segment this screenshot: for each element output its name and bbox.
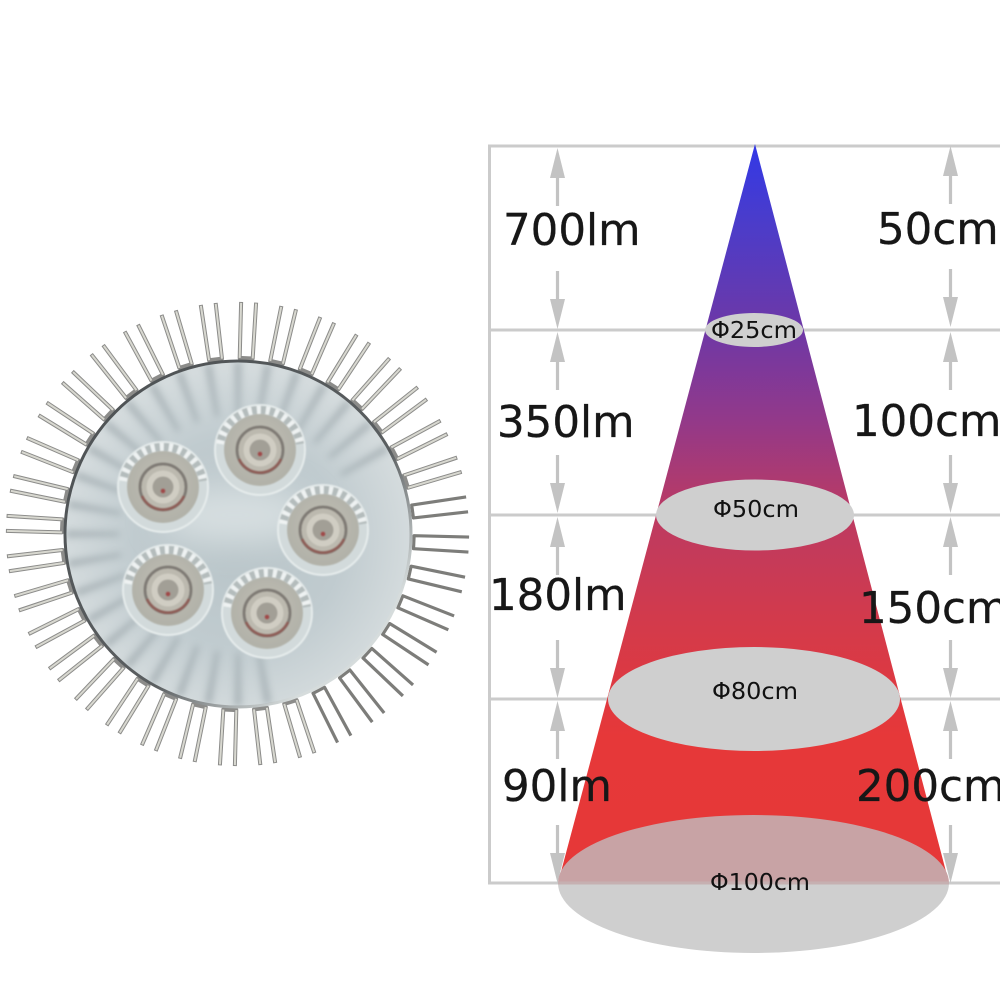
distance labels: 50cm [877, 205, 999, 255]
beam ellipse 50cm: Φ50cm [713, 497, 799, 523]
icon: LED lens 3 [278, 485, 368, 575]
lumen labels: 350lm [497, 398, 634, 448]
lumen labels: 90lm [502, 762, 612, 812]
lumen labels [489, 206, 640, 812]
lumen labels: 180lm [489, 571, 626, 621]
panel: LED lamp photo [6, 302, 469, 766]
reflected fin shadows [66, 362, 389, 706]
beam ellipse 25cm [705, 313, 803, 347]
beam ellipse 80cm [608, 647, 900, 751]
icon: LED lens 1 [118, 442, 208, 532]
left arrows [550, 148, 565, 883]
beam ellipse 25cm: Φ25cm [711, 318, 797, 344]
icon: LED lens 5 [222, 568, 312, 658]
right arrows [943, 146, 958, 883]
beam ellipse 80cm: Φ80cm [712, 679, 798, 705]
lumen labels: 700lm [503, 206, 640, 256]
beam ellipse 50cm [656, 480, 854, 550]
distance labels [852, 205, 1000, 812]
lamp face disc [65, 361, 411, 707]
chart frame and distance grid [489, 146, 1000, 883]
distance labels: 100cm [852, 397, 1000, 447]
light cone [558, 144, 949, 883]
heat sink fins [6, 302, 469, 766]
beam ellipse 100cm [558, 813, 949, 953]
beam ellipse 100cm: Φ100cm [710, 870, 810, 896]
icon: LED lens 4 [123, 545, 213, 635]
icon: LED lens 2 [215, 405, 305, 495]
centre highlight on disc [160, 485, 310, 545]
